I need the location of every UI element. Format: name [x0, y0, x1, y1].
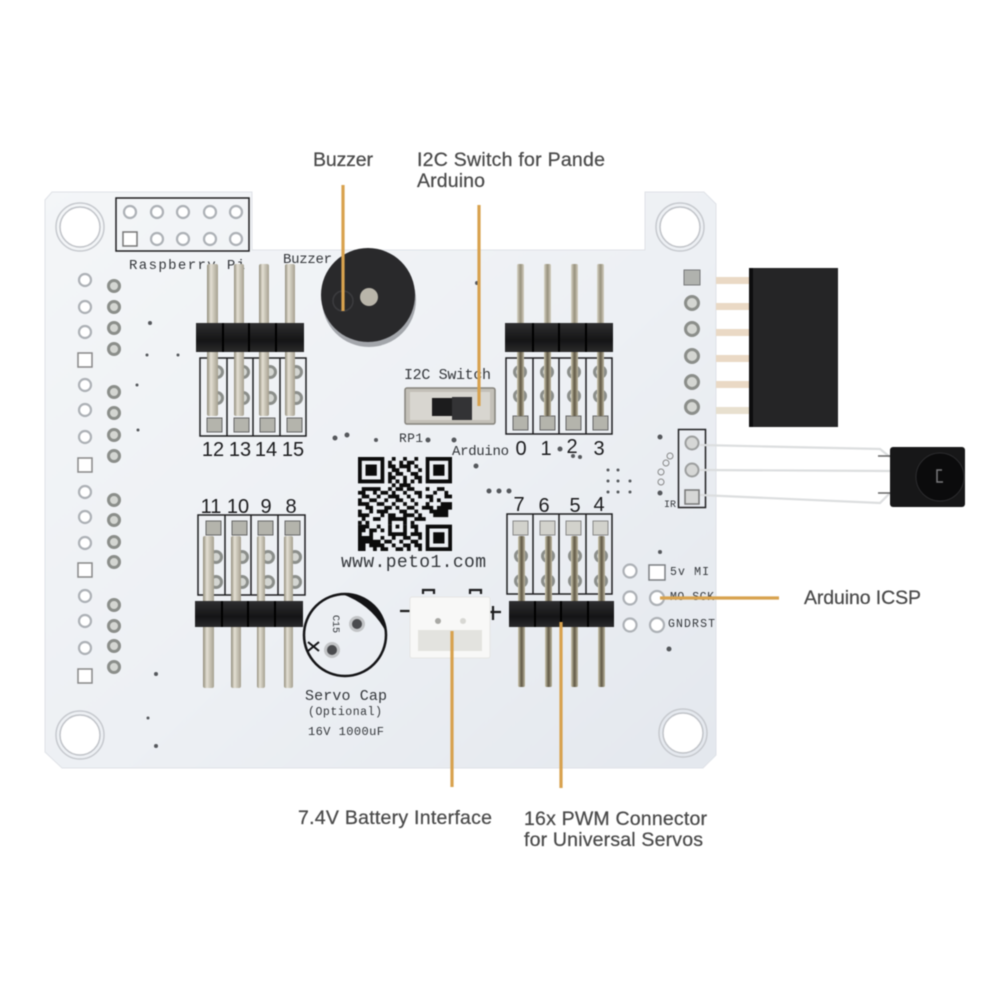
servo header: channels 7 6 5 4	[507, 514, 614, 687]
silkscreen: Raspberry Pi: Raspberry Pi	[129, 258, 245, 274]
QR code	[358, 457, 452, 551]
right edge pads	[684, 270, 700, 414]
servo capacitor footprint: C15	[329, 615, 340, 633]
buzzer	[321, 248, 416, 347]
silkscreen: I2C Switch: I2C Switch	[404, 367, 491, 384]
labels 0 1 2 3: 0	[515, 438, 527, 460]
labels 0 1 2 3: 1	[540, 438, 552, 460]
silkscreen: Servo Cap: Servo Cap	[305, 688, 387, 705]
servo header: channels 0-3	[505, 264, 613, 434]
labels 12 13 14 15: 13	[229, 439, 251, 461]
silkscreen: Servo Cap	[305, 688, 387, 739]
mounting holes	[56, 203, 707, 759]
callout text: PWM: 16x PWM Connector	[524, 808, 708, 830]
callout leader: I2C switch	[477, 205, 481, 406]
callout text: Battery: 7.4V Battery Interface	[298, 807, 492, 829]
labels 7 6 5 4	[513, 494, 605, 517]
I2C switch	[405, 388, 495, 424]
callout text: PWM	[524, 808, 708, 851]
labels 0 1 2 3	[515, 436, 605, 460]
labels 11 10 9 8	[201, 496, 297, 518]
callout text: PWM: for Universal Servos	[524, 829, 703, 851]
IR sensor footprint	[658, 430, 706, 511]
callout text: Buzzer: Buzzer	[313, 149, 374, 171]
IR receiver with leads	[700, 445, 965, 507]
labels 0 1 2 3: 2	[566, 436, 578, 458]
ICSP pads and labels: 5v MI	[670, 566, 709, 579]
callout leader: PWM	[559, 622, 563, 788]
labels 11 10 9 8: 9	[260, 496, 272, 518]
labels 12 13 14 15	[202, 439, 304, 461]
labels 7 6 5 4: 7	[513, 494, 525, 516]
silkscreen: RP1: RP1	[399, 431, 423, 446]
callout leader: Battery	[450, 631, 454, 787]
panel: white controller board	[45, 192, 716, 768]
labels 12 13 14 15: 12	[202, 439, 224, 461]
callout leader: ICSP	[660, 596, 779, 600]
labels 7 6 5 4: 4	[593, 494, 605, 516]
labels 11 10 9 8: 11	[201, 496, 221, 518]
silkscreen: Arduino: Arduino	[452, 444, 509, 460]
left edge pads	[78, 274, 120, 683]
servo capacitor footprint	[304, 594, 386, 676]
Raspberry Pi header footprint	[116, 198, 249, 251]
callout text: Arduino ICSP: Arduino ICSP	[804, 587, 921, 609]
ICSP pads and labels: GNDRST	[668, 618, 715, 631]
servo header: channels 12-15	[196, 264, 306, 436]
battery connector	[400, 590, 501, 658]
small vias	[136, 281, 672, 748]
6-pin black socket header	[716, 268, 838, 427]
silkscreen: Buzzer: Buzzer	[283, 252, 332, 268]
labels 11 10 9 8: 10	[227, 496, 249, 518]
labels 0 1 2 3: 3	[593, 438, 605, 460]
callout leader: Buzzer	[341, 185, 345, 311]
silkscreen: Servo Cap: 16V 1000uF	[308, 725, 384, 739]
labels 12 13 14 15: 14	[255, 439, 277, 461]
ICSP pads and labels	[624, 564, 715, 632]
servo header: channels 11 10 9 8	[195, 515, 305, 688]
silkscreen: Servo Cap: (Optional)	[308, 706, 382, 719]
ICSP pads and labels: MO SCK	[670, 591, 714, 604]
website URL: www.peto1.com	[341, 553, 486, 573]
callout text: I2C Switch	[417, 149, 605, 192]
labels 11 10 9 8: 8	[285, 496, 297, 518]
labels 7 6 5 4: 6	[538, 495, 550, 517]
labels 7 6 5 4: 5	[569, 495, 581, 517]
callout text: I2C Switch: I2C Switch for Pande	[417, 149, 605, 171]
IR sensor footprint: IR	[664, 500, 676, 511]
labels 12 13 14 15: 15	[282, 439, 304, 461]
callout text: I2C Switch: Arduino	[417, 170, 485, 192]
